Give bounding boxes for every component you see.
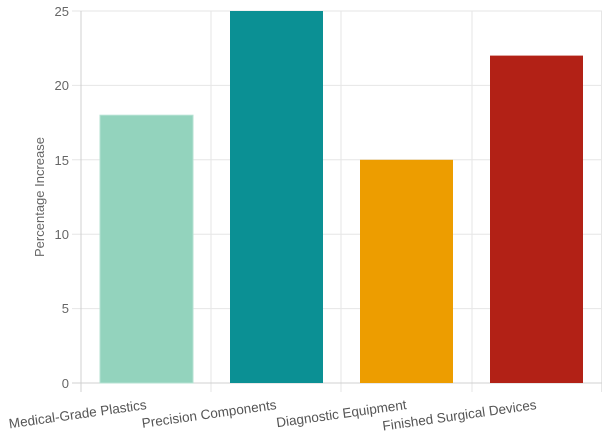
x axis labels: Diagnostic Equipment [275, 397, 408, 430]
y axis title: Percentage Increase [32, 137, 47, 257]
y axis tick labels: 25 [55, 4, 69, 19]
bar: Finished Surgical Devices [490, 56, 583, 383]
bar: Precision Components [230, 11, 323, 383]
x axis labels [8, 397, 538, 434]
x axis labels: Precision Components [141, 397, 278, 431]
bar: Medical-Grade Plastics [100, 115, 193, 383]
y axis tick labels: 5 [62, 301, 69, 316]
y axis tick labels: 20 [55, 78, 69, 93]
x axis labels: Medical-Grade Plastics [8, 397, 148, 431]
x axis labels: Finished Surgical Devices [382, 397, 538, 434]
y axis tick labels [55, 4, 69, 391]
bar: Diagnostic Equipment [360, 160, 453, 383]
y axis tick labels: 10 [55, 227, 69, 242]
y axis tick labels: 15 [55, 153, 69, 168]
y axis tick labels: 0 [62, 376, 69, 391]
